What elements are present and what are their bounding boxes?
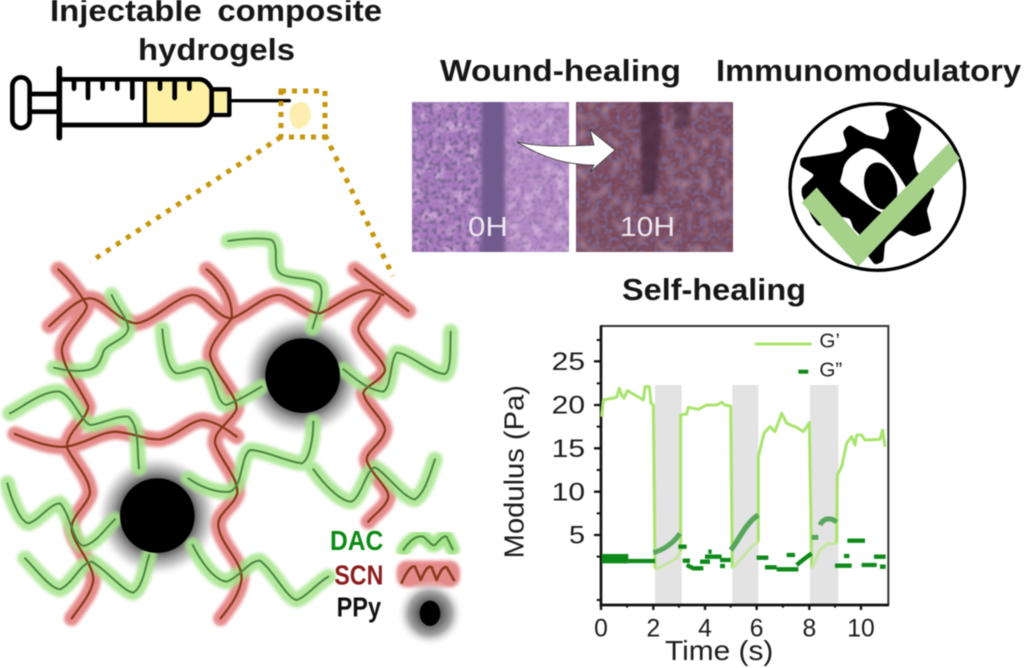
- arrow: wound closure: [517, 130, 615, 172]
- DAC glow: [7, 238, 451, 600]
- PPy particles: [120, 338, 340, 553]
- shaded intervals: [655, 385, 838, 605]
- y tick labels: 15: [552, 436, 585, 463]
- G' series: [602, 387, 885, 569]
- x axis title: Time (s): [665, 635, 773, 666]
- legend swatch: DAC: [403, 536, 453, 550]
- y tick labels: [552, 349, 585, 550]
- icon: macrophage with check mark: [790, 104, 965, 270]
- x tick labels: 6: [750, 616, 764, 643]
- x tick labels: 0: [594, 616, 608, 643]
- title: injectable composite hydrogels: hydrogels: [138, 32, 295, 67]
- x tick labels: 4: [698, 616, 712, 643]
- network diagram: hydrogel polymer network: [7, 238, 451, 618]
- icon: hydrogel droplet: [289, 102, 311, 129]
- heading: self-healing: Self-healing: [622, 272, 806, 307]
- legend labels: [330, 525, 383, 623]
- PPy glow halos: [96, 314, 364, 577]
- nucleus: [859, 159, 902, 213]
- cell body: [800, 107, 935, 265]
- DAC chains: [7, 238, 451, 600]
- micrograph: 10H: [576, 98, 733, 252]
- y axis title: Modulus (Pa): [498, 385, 529, 558]
- cytoplasm: [840, 148, 907, 213]
- heading: immunomodulatory: Immunomodulatory: [716, 53, 1022, 88]
- y tick labels: 25: [552, 349, 585, 376]
- zoom callout: dotted square and guide lines: [90, 91, 393, 276]
- title: injectable composite hydrogels: [50, 0, 382, 67]
- legend labels: PPy: [337, 592, 382, 623]
- y tick labels: 20: [552, 393, 585, 420]
- axes frame: [594, 325, 889, 610]
- y tick labels: 10: [552, 479, 585, 506]
- legend swatch: PPy: [397, 580, 463, 647]
- SCN glow: [15, 269, 408, 618]
- x tick labels: 10: [847, 616, 875, 643]
- x tick labels: [594, 616, 875, 643]
- y tick labels: 5: [569, 523, 585, 550]
- line chart: modulus vs time: [498, 325, 889, 666]
- legend swatch: SCN: [397, 561, 460, 587]
- micrograph: 0H: [412, 96, 569, 258]
- x tick labels: 8: [802, 616, 816, 643]
- SCN chains: [15, 269, 408, 618]
- legend labels: SCN: [334, 560, 383, 591]
- micrograph: 10H: 10H: [620, 211, 675, 242]
- micrograph: 0H: 0H: [468, 211, 508, 242]
- check mark: [802, 143, 960, 267]
- chart legend: G”: [819, 359, 842, 382]
- legend: DAC, SCN, PPy: [330, 525, 463, 647]
- x tick labels: 2: [646, 616, 660, 643]
- heading: wound-healing: Wound-healing: [440, 53, 681, 88]
- G'' series: [602, 515, 886, 569]
- chart legend: G’: [819, 329, 840, 352]
- chart legend: [755, 329, 842, 382]
- legend labels: DAC: [330, 525, 383, 556]
- icon: syringe: [12, 69, 289, 138]
- circle outline: [790, 104, 965, 270]
